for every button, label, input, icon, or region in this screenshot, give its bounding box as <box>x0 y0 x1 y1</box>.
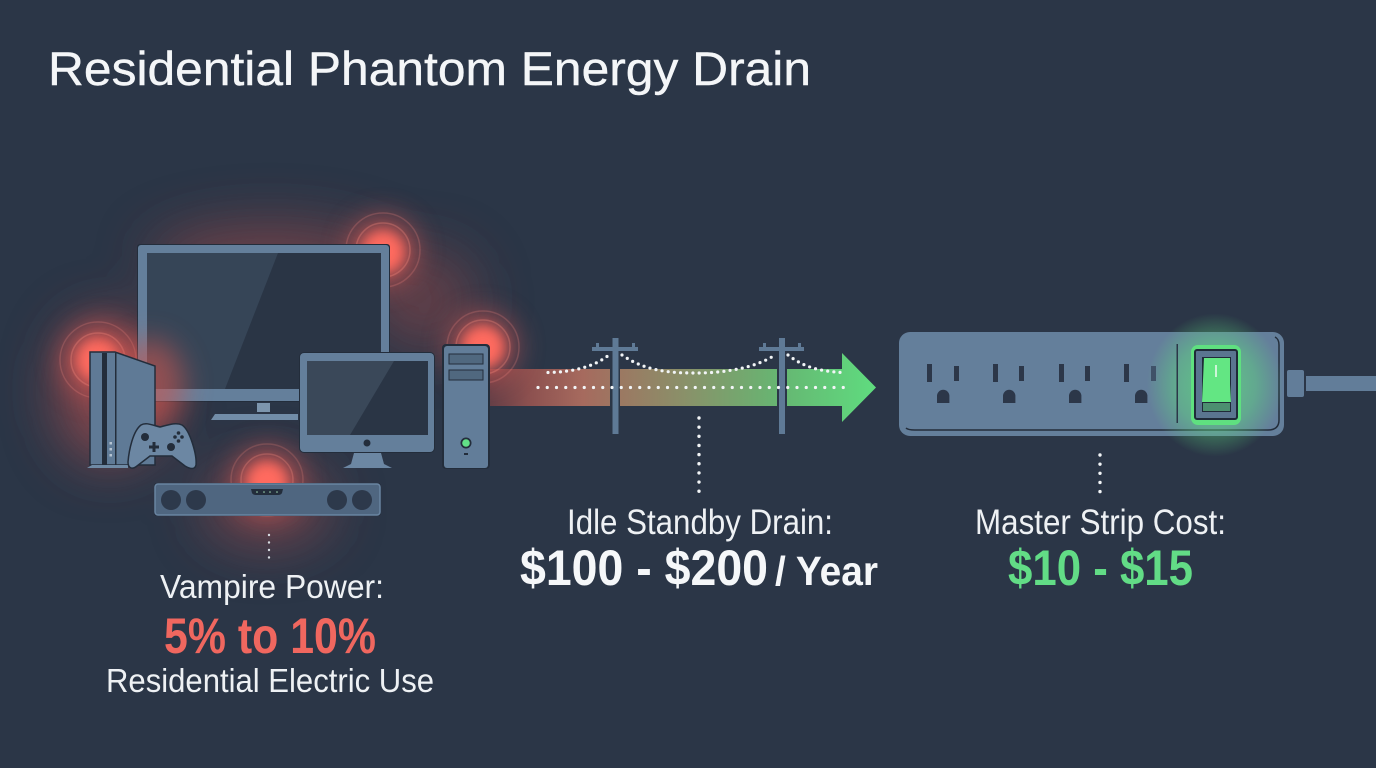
text block: vampire power <box>106 568 434 699</box>
caption: Residential Electric Use <box>106 662 434 699</box>
icon: utility pole right <box>759 338 804 434</box>
dotted power lines <box>538 355 846 388</box>
green switch glow <box>1147 313 1283 457</box>
icon: game console <box>87 352 155 468</box>
power strip <box>899 313 1376 457</box>
icon: strip plug and cord <box>1287 370 1376 397</box>
label: Idle Standby Drain: <box>567 503 833 542</box>
dotted leader: idle standby <box>697 418 701 492</box>
icon: game controller <box>128 424 196 468</box>
red glow: spill over lower-left of TV <box>116 339 184 431</box>
icon: soundbar <box>154 483 381 516</box>
divider <box>1176 344 1178 423</box>
icon: glowing rocker switch <box>1191 345 1241 425</box>
dotted leader: master strip <box>1098 455 1102 493</box>
value: $10 - $15 <box>1008 540 1193 596</box>
unit: / Year <box>775 548 878 594</box>
dotted leader: vampire power <box>268 535 270 558</box>
red glow: soundbar <box>231 444 303 516</box>
arrow: energy flow from red to green <box>490 353 876 422</box>
outlets <box>927 364 1156 403</box>
red glow: ambient haze <box>58 226 475 543</box>
red glow: left of console <box>60 322 136 398</box>
value: $100 - $200 <box>520 540 768 596</box>
device cluster with red standby glows <box>58 213 519 543</box>
text block: master strip cost <box>975 503 1226 596</box>
red glow: top right of TV <box>346 213 420 287</box>
label: Vampire Power: <box>160 568 384 605</box>
icon: television <box>137 244 390 420</box>
icon: tower PC <box>442 344 490 469</box>
value: 5% to 10% <box>164 608 376 664</box>
text block: idle standby drain <box>520 503 878 596</box>
icon: desktop monitor <box>299 352 435 468</box>
title: Residential Phantom Energy Drain <box>48 42 811 95</box>
label: Master Strip Cost: <box>975 503 1226 542</box>
red glow: tower PC <box>447 311 519 383</box>
icon: utility pole left <box>592 338 638 434</box>
strip body <box>899 332 1284 436</box>
